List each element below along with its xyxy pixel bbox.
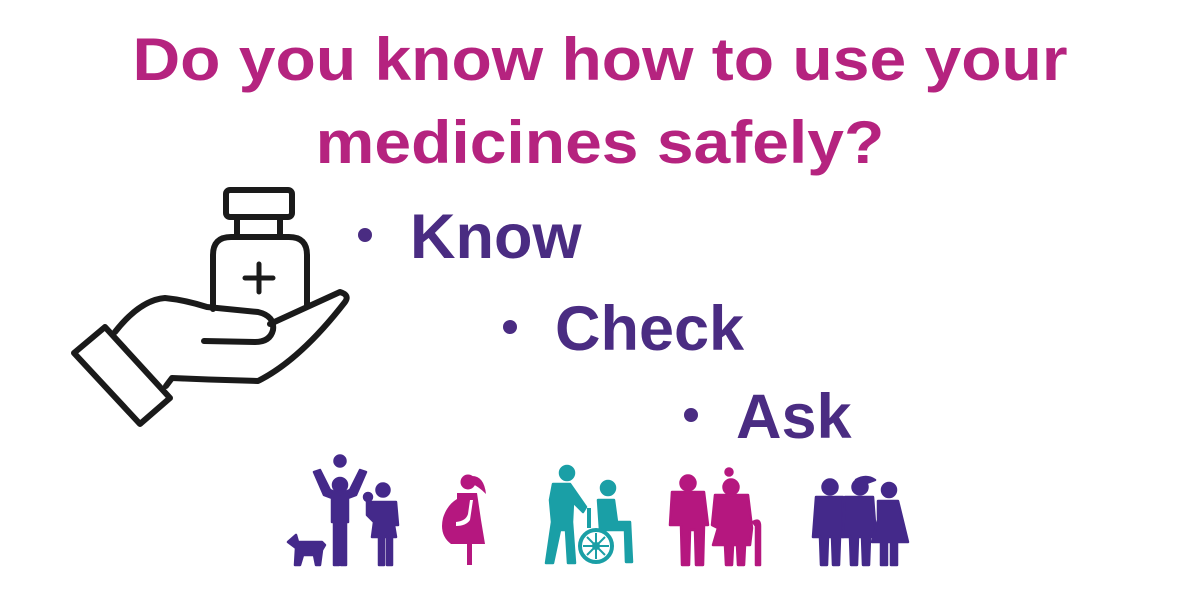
icon: group of three bbox=[813, 477, 908, 565]
bullet: Check: Check bbox=[555, 294, 744, 364]
title: medicines safely? bbox=[316, 109, 884, 176]
title bbox=[132, 26, 1068, 176]
bullet: Ask: Ask bbox=[736, 382, 852, 452]
icon: elderly couple bbox=[670, 468, 760, 565]
bullet: Ask bbox=[684, 382, 852, 452]
icon: family with dog bbox=[288, 456, 398, 565]
icon: hand holding medicine bottle bbox=[71, 187, 350, 427]
icon: carer with wheelchair bbox=[546, 466, 632, 563]
icon: pregnant woman bbox=[442, 474, 486, 565]
title: Do you know how to use your bbox=[132, 26, 1068, 93]
bullet: Know: Know bbox=[410, 202, 581, 272]
